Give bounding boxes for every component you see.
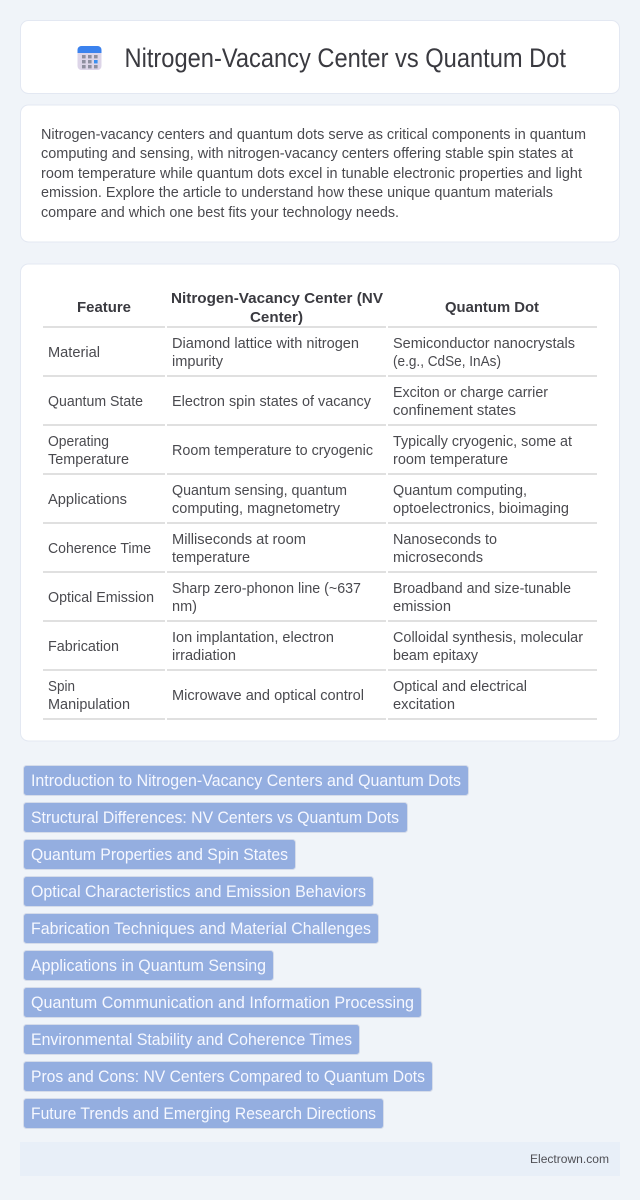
intro text [41, 126, 586, 221]
table header row [77, 290, 539, 326]
row: material: Material [48, 345, 100, 361]
row: material: Diamond lattice with nitrogen [172, 336, 359, 352]
row: optical emission: Sharp zero-phonon line (~637 [172, 581, 361, 597]
row: operating temperature: Typically cryogenic, some at [393, 434, 572, 450]
title: Nitrogen-Vacancy Center vs Quantum Dot [124, 43, 567, 73]
link 4: Optical Characteristics and Emission Behaviors [31, 882, 366, 901]
row: fabrication: beam epitaxy [393, 648, 479, 664]
link 6: Applications in Quantum Sensing [31, 956, 266, 975]
row: spin manipulation: Manipulation [48, 697, 130, 713]
link 5: Fabrication Techniques and Material Challenges [31, 919, 371, 938]
table header row: Feature [77, 299, 131, 316]
link 4 [24, 876, 374, 906]
link 3 [24, 840, 296, 870]
row: fabrication [48, 630, 583, 664]
row: material [48, 336, 575, 370]
link 1 [24, 766, 468, 796]
row: fabrication: Ion implantation, electron [172, 630, 334, 646]
row: applications: Applications [48, 492, 127, 508]
link 9: Pros and Cons: NV Centers Compared to Quantum Dots [31, 1067, 425, 1086]
link 6 [24, 950, 274, 980]
row: quantum state: Exciton or charge carrier [393, 385, 548, 401]
row: quantum state [48, 385, 548, 419]
footer: Electrown.com [530, 1152, 609, 1166]
row: applications: optoelectronics, bioimaging [393, 501, 569, 517]
footer [20, 1142, 620, 1176]
table header row: Quantum Dot [445, 299, 539, 316]
row: optical emission: nm) [172, 599, 197, 615]
panel: comparison table [20, 264, 620, 741]
row: material: impurity [172, 354, 224, 370]
row: operating temperature [48, 434, 572, 468]
row: coherence time: microseconds [393, 550, 483, 566]
row: applications: computing, magnetometry [172, 501, 341, 517]
row: operating temperature: Room temperature to cryogenic [172, 443, 373, 459]
panel: title header [20, 20, 620, 94]
row: spin manipulation [48, 679, 527, 713]
link 10: Future Trends and Emerging Research Directions [31, 1104, 376, 1123]
intro text: compare and which one best fits your technology needs. [41, 204, 399, 221]
link 7 [24, 988, 422, 1018]
row: operating temperature: Operating [48, 434, 109, 450]
row: spin manipulation: excitation [393, 697, 455, 713]
row: coherence time: Nanoseconds to [393, 532, 497, 548]
link 3: Quantum Properties and Spin States [31, 845, 288, 864]
row: optical emission: Optical Emission [48, 590, 154, 606]
row: operating temperature: room temperature [393, 452, 508, 468]
row: applications [48, 483, 569, 517]
table of contents links [24, 766, 468, 1128]
intro text: Nitrogen-vacancy centers and quantum dots serve as critical components in quantum [41, 126, 586, 143]
row: spin manipulation: Microwave and optical control [172, 688, 364, 704]
row: optical emission: Broadband and size-tunable [393, 581, 571, 597]
row: optical emission [48, 581, 571, 615]
intro text: emission. Explore the article to understand how these unique quantum materials [41, 184, 553, 201]
row: quantum state: Quantum State [48, 394, 143, 410]
row: operating temperature: Temperature [48, 452, 129, 468]
link 2 [24, 802, 408, 832]
intro text: computing and sensing, with nitrogen-vacancy centers offering stable spin states at [41, 145, 574, 162]
row: coherence time: Milliseconds at room [172, 532, 306, 548]
row: coherence time [48, 532, 497, 566]
row: material: Semiconductor nanocrystals [393, 336, 575, 352]
row: applications: Quantum sensing, quantum [172, 483, 347, 499]
row: fabrication: Fabrication [48, 639, 119, 655]
link 9 [24, 1062, 432, 1092]
row: fabrication: irradiation [172, 648, 236, 664]
intro text: room temperature while quantum dots excel in tunable electronic properties and light [41, 165, 583, 182]
link 8 [24, 1024, 360, 1054]
row: optical emission: emission [393, 599, 451, 615]
row: coherence time: temperature [172, 550, 250, 566]
row: quantum state: confinement states [393, 403, 516, 419]
table header row: Nitrogen-Vacancy Center (NV [171, 290, 383, 307]
row: spin manipulation: Optical and electrical [393, 679, 527, 695]
link 5 [24, 914, 378, 944]
link 2: Structural Differences: NV Centers vs Quantum Dots [31, 808, 399, 827]
link 10 [24, 1098, 384, 1128]
table header row: Center) [250, 309, 303, 326]
link 8: Environmental Stability and Coherence Times [31, 1030, 352, 1049]
row: material: (e.g., CdSe, InAs) [393, 354, 501, 370]
panel: introduction [20, 105, 620, 242]
row: spin manipulation: Spin [48, 679, 75, 695]
row: fabrication: Colloidal synthesis, molecular [393, 630, 583, 646]
link 7: Quantum Communication and Information Processing [31, 993, 414, 1012]
row: applications: Quantum computing, [393, 483, 527, 499]
link 1: Introduction to Nitrogen-Vacancy Centers and Quantum Dots [31, 771, 461, 790]
row: quantum state: Electron spin states of vacancy [172, 394, 372, 410]
icon: calendar [78, 46, 102, 70]
row: coherence time: Coherence Time [48, 541, 151, 557]
